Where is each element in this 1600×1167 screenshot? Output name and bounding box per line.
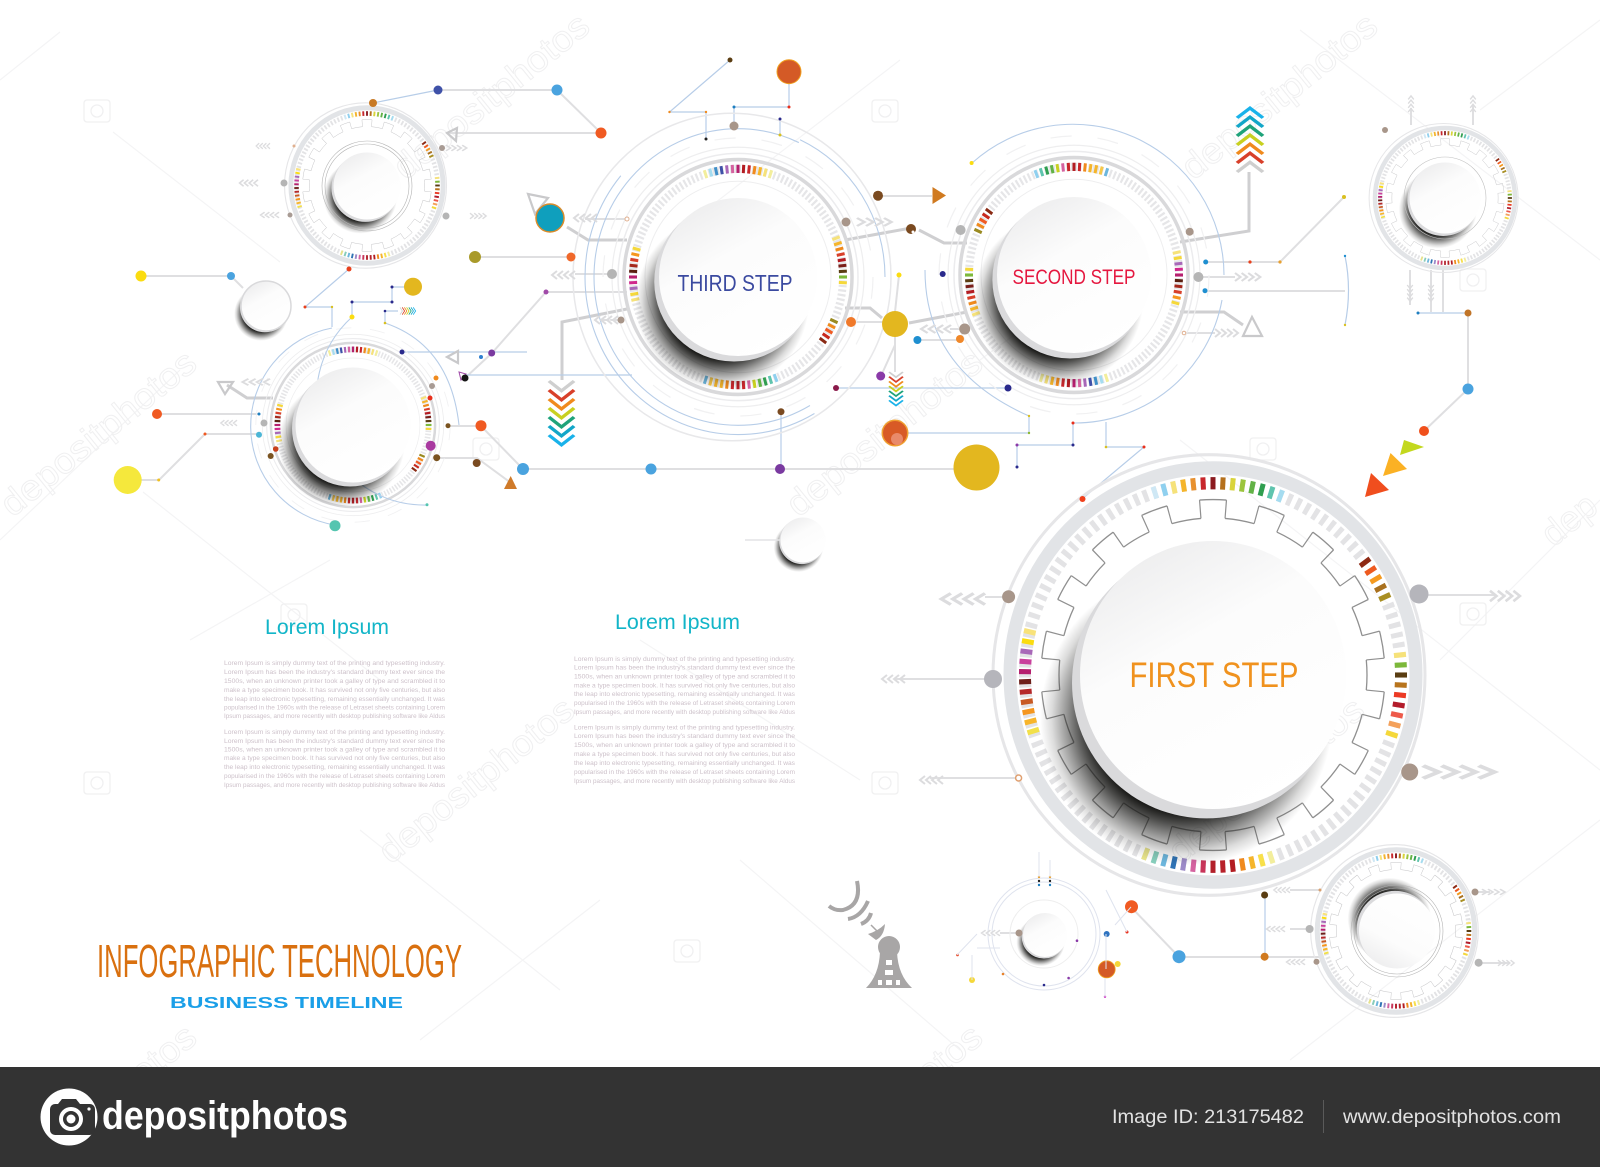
heading: left lorem ipsum: Lorem Ipsum — [265, 616, 389, 639]
colored chevron arrow: down under third step — [549, 381, 574, 445]
watermark: depositphotos text: depositphotos — [778, 341, 990, 524]
circuit node dots: right side — [984, 127, 1474, 781]
text block: right paragraphs: the leap into electronic typesetting, remaining essentially unchanged. It was — [574, 691, 796, 698]
heading: right lorem ipsum: Lorem Ipsum — [615, 611, 740, 634]
small button: center — [745, 518, 826, 572]
text block: left paragraphs — [224, 660, 446, 789]
small button: near left dial — [234, 281, 291, 341]
text block: left paragraphs: the leap into electronic typesetting, remaining essentially unchanged. It was — [224, 696, 446, 703]
panel: first step dial — [993, 455, 1425, 895]
circuit node dots: center bus — [618, 58, 1146, 502]
panel: top-right small gear dial — [1369, 123, 1518, 273]
text block: right paragraphs: Ipsum passages, and more recently with desktop publishing software like Aldus — [574, 778, 796, 785]
blue orbit arcs — [585, 119, 891, 435]
text block: left paragraphs: Lorem Ipsum is simply dummy text of the printing and typesetting industry. — [224, 729, 445, 736]
label: third step: THIRD STEP — [678, 270, 792, 296]
panel: top-left small gear dial — [284, 103, 446, 268]
icon: antenna tower — [829, 881, 912, 988]
blue orbit arcs left — [251, 317, 459, 525]
text block: right paragraphs: the leap into electronic typesetting, remaining essentially unchanged. It was — [574, 760, 796, 767]
text block: left paragraphs: Ipsum passages, and more recently with desktop publishing software like Aldus — [224, 782, 446, 789]
subtitle: BUSINESS TIMELINE — [170, 995, 403, 1012]
text block: right paragraphs — [574, 656, 796, 785]
panel: second step dial — [925, 124, 1224, 423]
text block: left paragraphs: Lorem Ipsum has been the industry's standard dummy text ever since the — [224, 738, 445, 745]
circuit connector lines: blue traces — [305, 60, 1468, 957]
footer website: www.depositphotos.com — [1342, 1106, 1561, 1128]
text block: left paragraphs: Lorem Ipsum is simply dummy text of the printing and typesetting industry. — [224, 660, 445, 667]
text block: left paragraphs: popularised in the 1960s with the release of Letraset sheets containing Lorem — [224, 704, 445, 712]
text block: left paragraphs: the leap into electronic typesetting, remaining essentially unchanged. It was — [224, 764, 446, 771]
text block: right paragraphs: make a type specimen book. It has survived not only five centuries, but also — [574, 751, 795, 758]
label: first step: FIRST STEP — [1130, 656, 1298, 695]
circuit node dots: left dial satellites — [114, 376, 529, 531]
watermark: depositphotos text: depositphotos — [385, 4, 597, 187]
solid triangles — [459, 187, 1424, 497]
text block: right paragraphs: popularised in the 1960s with the release of Letraset sheets containing Lorem — [574, 769, 795, 776]
circuit node dots: bottom right — [956, 852, 1483, 998]
title: INFOGRAPHIC TECHNOLOGY — [97, 935, 462, 987]
colored chevron arrow: right small — [400, 307, 416, 315]
text block: right paragraphs: Lorem Ipsum has been the industry's standard dummy text ever since the — [574, 664, 795, 672]
text block: right paragraphs: make a type specimen book. It has survived not only five centuries, but also — [574, 682, 795, 690]
text block: left paragraphs: 1500s, when an unknown printer took a galley of type and scrambled it to — [224, 678, 445, 685]
footer image id: Image ID: 213175482 — [1112, 1106, 1304, 1128]
outlined triangles — [218, 128, 1262, 394]
blue orbit arcs second — [925, 124, 1224, 423]
text block: left paragraphs: Ipsum passages, and more recently with desktop publishing software like Aldus — [224, 713, 446, 720]
footer bar — [0, 1067, 1600, 1167]
text block: left paragraphs: make a type specimen book. It has survived not only five centuries, but also — [224, 755, 445, 762]
circuit connector lines: thick gray leaders — [227, 172, 1249, 398]
text block: left paragraphs: Lorem Ipsum has been the industry's standard dummy text ever since the — [224, 669, 445, 676]
circuit node dots: top and upper left — [136, 84, 617, 382]
panel: left blank dial — [251, 317, 459, 525]
text block: right paragraphs: 1500s, when an unknown printer took a galley of type and scrambled it to — [574, 674, 795, 680]
text block: right paragraphs: Lorem Ipsum has been the industry's standard dummy text ever since the — [574, 733, 795, 740]
watermark: depositphotos text: depositphotos — [1173, 4, 1385, 187]
panel: bottom small hub dial — [988, 878, 1100, 990]
watermark: depositphotos text: depositphotos — [370, 688, 582, 871]
panel: third step dial — [573, 113, 891, 441]
text block: left paragraphs: popularised in the 1960s with the release of Letraset sheets containing Lorem — [224, 773, 445, 780]
text block: left paragraphs: 1500s, when an unknown printer took a galley of type and scrambled it to — [224, 746, 445, 754]
watermark: depositphotos text: depositphotos — [1160, 688, 1372, 871]
circuit connector lines: gray — [127, 90, 1510, 963]
panel: bottom-right small gear dial — [1311, 845, 1478, 1017]
text block: right paragraphs: Ipsum passages, and more recently with desktop publishing software like Aldus — [574, 709, 796, 716]
text block: right paragraphs: Lorem Ipsum is simply dummy text of the printing and typesetting industry. — [574, 724, 795, 732]
colored chevron arrow: down under gold dot — [889, 372, 903, 406]
colored chevron arrow: up above second step — [1237, 108, 1263, 172]
footer brand name: depositphotos — [102, 1094, 348, 1138]
watermark: camera marks — [84, 100, 1486, 962]
text block: left paragraphs: make a type specimen book. It has survived not only five centuries, but also — [224, 687, 445, 694]
text block: right paragraphs: popularised in the 1960s with the release of Letraset sheets containing Lorem — [574, 700, 795, 707]
label: second step: SECOND STEP — [1012, 266, 1136, 289]
text block: right paragraphs: Lorem Ipsum is simply dummy text of the printing and typesetting industry. — [574, 656, 795, 663]
icon: depositphotos camera logo — [40, 1088, 98, 1146]
outer ring — [573, 113, 891, 441]
gray chevron arrows — [221, 96, 1520, 966]
text block: right paragraphs: 1500s, when an unknown printer took a galley of type and scrambled it to — [574, 742, 795, 749]
